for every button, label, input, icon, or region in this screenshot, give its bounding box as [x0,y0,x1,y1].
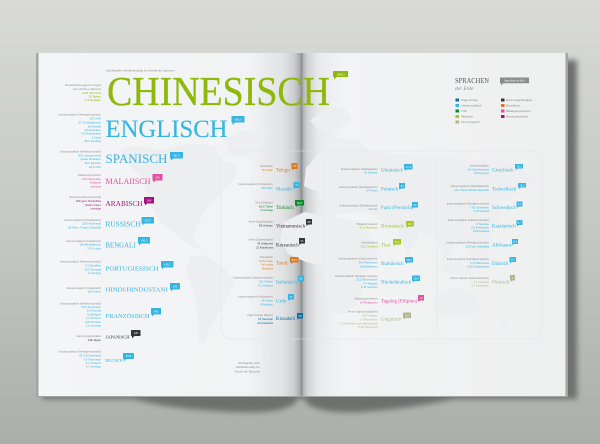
language: Ungarisch: 0,05 Österreich [358,325,378,329]
language: Französisch: 183 [154,309,159,313]
language: Deutsch [58,350,134,369]
language: Rumänisch: 28,2 [406,258,412,263]
legend: language families: Niger-Kongo [461,98,478,102]
panel: rounded frame [221,151,542,339]
language: Tamil: 63,5 [292,258,297,263]
language: Telugu [260,163,298,174]
language: Türkisch: 3 sonstige [260,208,273,212]
language: Russisch: 86 Wors. Sowjet. Republik [68,225,102,229]
language: Katalanisch: Indoeuropäisch (Galloromanisch) [448,218,489,222]
language: Italienisch: Italienisch [276,280,297,286]
language: Französisch: 0,05 Monaco [85,320,101,324]
language: Afrikaans: 6,3 [513,240,517,244]
language: Französisch: FRANZÖSISCH [106,313,150,320]
language: Deutsch: 3,7 sonstige [86,365,101,369]
language: Polnisch [339,183,405,192]
language: Bengali: BENGALI [106,243,136,250]
language: Malaiisch [78,173,162,189]
language: Arabisch: ARABISCH [106,199,143,208]
language: Spanisch: 26,4 USA [89,165,101,169]
language: Katalanisch: 0,05 Andorra [473,229,489,233]
language: Kisuaheli: Zentralafrika [257,321,273,325]
language: Türkisch: Türkisch [276,206,294,211]
language: Ukrainisch: Ukrainisch [381,169,403,174]
legend title: SPRACHEN [455,76,489,85]
language: Englisch [58,113,244,143]
language: Kisuaheli [247,313,303,325]
language: Malaiisch: Malaysia [90,181,101,185]
language: Russisch: 205,7 [144,218,152,223]
language: Spanisch: 303 Lateinamerika [78,153,101,157]
language: Schwedisch: 0,3 Finnland [474,209,489,213]
language: Italienisch: 61 [300,276,303,280]
language: Spanisch [60,149,183,169]
legend callout: Sprecher in Mio: Sprecher in Mio [504,78,525,82]
language: Italienisch: Indoeuropäisch (Italoromanisch) [233,276,273,280]
language: Katalanisch [448,218,522,233]
language: Französisch: 6,5 Kanada [87,309,101,313]
language: Schwedisch: 8,3 [518,202,522,207]
language: Marathi: Marathi [276,187,292,192]
language: Italienisch: 56,7 Italien [259,280,273,284]
book shadow [42,60,577,412]
language: Französisch: 1,3 Schweiz [86,316,102,320]
language: Dänisch: Indoeuropäisch (Nordgermanisch) [447,257,489,261]
language: Vietnamesisch: 68 [308,220,311,224]
language: Spanisch: (außer Brasilien) [80,157,101,161]
legend: language families: Dravidisch [506,104,520,108]
language: Polnisch: 37 Polen [366,188,378,192]
language: Dänisch: 5,5 [511,258,515,262]
language: Vietnamesisch [249,219,312,230]
language: Englisch: 16 Australien [85,128,101,132]
language: Finnisch: 4,7 Finnland [474,280,489,284]
note: panel scale: verhältnismäßig zur [236,365,260,369]
language: Chinesisch: CHINESISCH [107,68,330,114]
language: Kisuaheli: 18 Sansibar [258,317,273,321]
language: Polnisch: Polnisch [381,187,399,192]
language: Italienisch: 4,3 Schweiz [258,283,274,287]
language: Türkisch: 69,5 [297,201,303,206]
language: Griechisch: 9,6 Griechenland [468,167,489,171]
language: Thai: 25,5 [394,240,400,245]
language: Niederländisch: 15,2 Niederlande [356,278,378,282]
language: Farsi: 34 Iran [369,207,378,211]
language: Japanisch [77,330,140,342]
language: Ungarisch [340,310,411,329]
language: Urdu: 55 [290,295,293,299]
legend: language families: Indoeuropäisch [461,104,482,108]
language: Afrikaans: Indoeuropäisch (Westgermanisch) [446,240,489,244]
language: Deutsch: Indoeuropäisch (Westgermanisch) [58,350,101,354]
language: Tagalog: Tagalog (Filipino) [381,299,418,304]
language: Koreanisch: 22 Nordkorea [256,245,273,249]
language: Ukrainisch: Indoeuropäisch (Ostslawisch) [341,167,378,171]
language: Tschechisch [450,183,526,192]
language: Niederländisch: Niederländisch [381,280,412,286]
language: Ukrainisch: 47,4 [406,165,411,170]
language: Afrikaans [446,239,518,248]
legend: language families: Tibetisch [461,114,473,118]
language: Schwedisch: 7,65 Schweden [470,205,489,209]
language: Japanisch: keine Zugehörigkeit [77,334,101,338]
language: Dänisch [447,257,516,269]
language: Vietnamesisch: 68 Vietnam [259,224,274,228]
language: Arabisch: 209 [147,198,152,202]
language: Rumänisch: Indoeuropäisch (Ostromanisch) [338,256,378,260]
language: Portugiesisch: 172 Brasilien [85,263,101,267]
language: Bengali: 196,5 [141,238,148,243]
language: Chinesisch: 2,3 Singapur [85,98,101,102]
language: Hindi/Hindustani: HINDI/HINDUSTANI [106,287,168,294]
language: Dänisch: 0,05 Deutschland [467,265,489,269]
language: Birmanisch: 32,5 [407,222,413,227]
language: Niederländisch: Indoeuropäisch (Westgermanisch) [335,274,378,278]
legend: language families: Turk [461,109,467,113]
language: Urdu [238,294,294,306]
language: Spanisch: SPANISCH [106,152,168,166]
language: Finnisch: 0,3 Schweden [471,284,489,288]
language: Thai: 25,5 Thailand [361,244,378,248]
language: Englisch: 227 USA [90,116,101,120]
language: Französisch: 3,5 Belgien [87,312,101,316]
language: Ungarisch: 0,35 Serbien und Montenegro [340,322,378,326]
legend: language families: keine Zugehörigkeit [506,98,532,102]
language: Deutsch: 4,2 Schweiz [86,361,102,365]
language: Kisuaheli: Kisuaheli [276,317,296,322]
language: Spanisch: 36,9 Spanien [84,161,101,165]
legend: language families: Hamitosemitisch [506,114,528,118]
language: Telugu: Telugu [276,169,290,174]
language: Chinesisch: 1066,3 [336,72,345,77]
language: Telugu: 74 [293,164,296,168]
language: Urdu: Indoeuropäisch (Indoarisch) [238,294,273,298]
language: Tschechisch: 10,2 Tschechische Republik [454,188,490,192]
language: Türkisch: 66,5 Türkei [259,204,273,208]
language: Malaiisch: 230 [155,175,160,179]
language: Deutsch: 82,3 Deutschland [79,354,101,358]
language: Birmanisch [356,221,414,230]
language: Dänisch: 5,47 Dänemark [470,261,490,265]
language: Farsi [340,202,418,211]
language: Türkisch: Turk (Altaisch) [255,200,273,204]
language: Koreanisch: 65 [300,239,304,243]
legend title: der Erde [455,86,474,92]
language: Deutsch: 97,8 [126,354,132,359]
language: Japanisch: 126 Japan [88,338,101,342]
language: Thai: Sinotibetisch [362,240,378,244]
language: Französisch: 59,5 Frankreich [82,305,101,309]
language: Tagalog: 16 Philippinen [360,300,378,304]
language: Niederländisch: 20,8 [413,276,419,281]
language: Malaiisch: MALAIISCH [106,177,151,186]
language: Chinesisch: 20 Taiwan [88,94,101,98]
language: Tagalog: Malaiopolynesisch [355,296,378,300]
language: Englisch: ENGLISCH [106,116,228,143]
language: Birmanisch: Birmanisch [381,224,405,230]
language: Malaiisch: 216 Indonesien [82,177,101,181]
language: Tagalog: 16 [420,296,423,300]
language: Tschechisch: Tschechisch [492,187,517,192]
language: Chinesisch: 1044 VR China [82,91,101,95]
language: Polnisch: Indoeuropäisch (Westslawisch) [339,185,378,189]
language: Farsi: Indoeuropäisch (Westiranisch) [340,204,378,208]
language: Französisch: 2,6 sonstige [86,324,101,328]
language: Rumänisch: Rumänisch [381,262,404,267]
legend: language families [456,98,532,124]
language: Ungarisch: 12,7 [404,313,410,318]
language: Schwedisch [447,202,522,213]
language: Katalanisch: Katalanisch [492,224,516,230]
language: Koreanisch [249,238,305,249]
language: Bengali: Indoeuropäisch (Indoarisch) [66,239,101,243]
language: Finnisch: Finnisch [492,280,510,286]
language: Finnisch [451,275,515,288]
language: Koreanisch: 43 Südkorea [257,242,273,246]
language: Vietnamesisch: keine Zugehörigkeit [249,220,273,224]
language: Englisch: 363,5 [235,118,242,122]
language: Niederländisch: 5,4 Belgien [364,282,378,286]
language: Dänisch: Dänisch [492,262,509,267]
language: Katalanisch: 0,3 Frankreich [471,226,489,230]
language: Katalanisch: 6 Spanien [476,222,489,226]
language: Griechisch: 10,2 [516,164,522,169]
language: Marathi: 71 [295,183,299,187]
language: Schwedisch: Schwedisch [492,206,516,211]
language: Koreanisch: keine Zugehörigkeit [249,238,273,242]
language: Vietnamesisch: Vietnamesisch [276,224,306,230]
language: Hindi/Hindustani: 182 [173,284,178,288]
language: Tamil: Tamil [276,262,288,267]
language: Englisch: 3,5 Neuseeland [81,132,101,136]
language: Tschechisch: Indoeuropäisch (Westslawisch) [450,184,489,188]
language: Rumänisch: 3,8 Moldawien [359,264,378,268]
language: Birmanisch: 31,5 Myanmar [360,226,378,230]
language: Japanisch: JAPANISCH [106,335,130,340]
language: Urdu: Urdu [276,300,287,304]
language: Finnisch: 5 [512,276,514,280]
language: Arabisch: Naher Osten [85,203,101,207]
language: Arabisch: sonstige [91,207,101,211]
column: largest languages [58,68,348,369]
language: Niederländisch: 0,45 Surinam [361,285,378,289]
language: Italienisch [233,276,304,287]
language: Arabisch: 209 ganz Nordafrika [76,199,101,203]
language: Tamil: 60,5 Indien [259,259,273,263]
language: Spanisch: Indoeuropäisch (Westromanisch) [60,149,101,153]
legend: language families: Malaiopolynesisch [506,109,531,113]
language: Griechisch: Griechisch [492,169,514,174]
language: Englisch: 57 Großbritannien [78,120,101,124]
column: languages in panel, first [233,163,312,325]
language: Portugiesisch: 10,2 Portugal [84,267,101,271]
language: Koreanisch: Koreanisch [276,243,299,248]
language: Marathi: Indoeuropäisch (Indoarisch) [238,182,273,186]
language: Englisch: Indoeuropäisch (Westgermanisch) [58,113,101,117]
language: Ungarisch: Finno-Ugrisch (Ugrisch) [348,310,378,314]
language: Urdu: 9 Pakistan [260,302,273,306]
language: Farsi: 43 [414,203,417,207]
language: Hindi/Hindustani: Indoeuropäisch (Indoarisch) [66,286,101,290]
note: font size scale: Schriftgröße verhältnismäßig zur Anzahl der Sprecher [106,68,175,72]
language: Kisuaheli: Niger-Kongo (Bantu) [247,313,273,317]
language: Tschechisch: 10,2 [519,183,525,188]
language: Finnisch: Finno-Ugrisch (Ostseefinnisch) [451,276,489,280]
language: Hindi/Hindustani [66,283,180,294]
language: Bengali: 120 Bangladesch [79,243,101,247]
language: Portugiesisch: Indoeuropäisch (Westromanisch) [60,260,101,264]
language: Türkisch [255,200,304,212]
language: Griechisch: 0,54 Zypern [474,171,489,175]
language: Telugu: Dravidisch [260,164,273,168]
language: Spanisch: 361,5 [173,153,180,158]
language: Portugiesisch [60,260,174,275]
language: Polnisch: 44 [400,184,404,188]
language: Griechisch: Indoeuropäisch [470,164,489,168]
language: Russisch: 119,6 Russland [82,222,101,226]
language: Urdu: 46 Indien [261,298,273,302]
language: Ungarisch: 1,4 Rumänien [360,318,378,322]
language: Malaiisch: Malaiopolynesisch [78,173,101,177]
language: Katalanisch: 6,7 [518,220,522,226]
language: Marathi: 68 Indien [261,186,273,190]
language: Portugiesisch: 8 sonstige [88,271,101,275]
language: Französisch [60,301,161,328]
language: Farsi: Farsi (Persisch) [381,206,413,211]
language: Französisch: Indoeuropäisch (Westromanisch) [60,301,101,305]
note: panel scale: Schriftgröße nicht [238,361,260,365]
language: Deutsch: DEUTSCH [106,359,123,363]
language: Portugiesisch: 190,2 [164,262,171,267]
language: Ukrainisch: 41 Ukraine [364,170,378,174]
language: Afrikaans: 6,3 Rep. Südafrika [466,244,489,248]
legend callout: Sprecher in Mio [500,78,529,86]
column: languages in panel, second [335,164,424,329]
language: Rumänisch [338,256,413,268]
language: Russisch: RUSSISCH [106,220,141,229]
language: Kisuaheli: 50 [298,314,302,318]
language: Tagalog [355,295,424,304]
language: Arabisch [69,195,154,211]
language: Tamil: Dravidisch [260,255,273,259]
language: Ungarisch: 10,2 Ungarn [362,314,378,318]
language: Englisch: 3 Irland [92,135,101,139]
language: Russisch [64,217,154,229]
note: panel scale [234,361,260,373]
language: Russisch: Indoeuropäisch (Ostslawisch) [64,218,101,222]
book pages [36,53,568,397]
world map [120,108,536,343]
language: Niederländisch [335,274,420,289]
language: Birmanisch: Tibetobirmanisch [356,222,378,226]
language: Ungarisch: Ungarisch [381,317,402,322]
language: Japanisch: 126 [133,331,138,335]
language: Bengali [66,237,150,251]
language: Englisch: 18 Kanada [87,124,101,128]
note: panel scale: Anzahl der Sprecher [234,369,260,373]
language: Schwedisch: Indoeuropäisch (Nordgermanisch) [447,202,489,206]
language: Afrikaans: Afrikaans [492,243,512,248]
language: Deutsch: 7,6 Österreich [83,357,101,361]
language: Hindi/Hindustani: 182 Indien [88,290,101,294]
language: Ukrainisch [341,164,412,174]
language: Portugiesisch: PORTUGIESISCH [106,266,159,273]
language: Tamil: Malaysia [262,266,273,270]
language: Tamil [259,255,298,270]
language: Thai [361,239,401,248]
legend title [455,76,489,92]
language: Marathi [238,182,300,192]
language: Arabisch: Hamitosemitisch (Zentral) [69,195,101,199]
language: Rumänisch: 24,4 Rumänien [359,260,378,264]
language: Tamil: Sri Lanka [261,263,273,267]
language: Malaiisch: sonstige [91,185,101,189]
language: Griechisch [468,164,523,175]
language: Chinesisch: Sinotibetisch (eigene Gruppe [65,83,101,87]
language: Chinesisch: mit mehreren Idiomen) [73,87,101,91]
language: Englisch: 38,5 sonstige [84,139,101,143]
language: Bengali: 76,5 Indien [87,247,101,251]
language: Telugu: 75 Indien [261,168,273,172]
legend: language families: Finno-Ugrisch [461,120,480,124]
language: Thai: Thai [381,243,391,248]
column: languages in panel, third [446,164,526,288]
